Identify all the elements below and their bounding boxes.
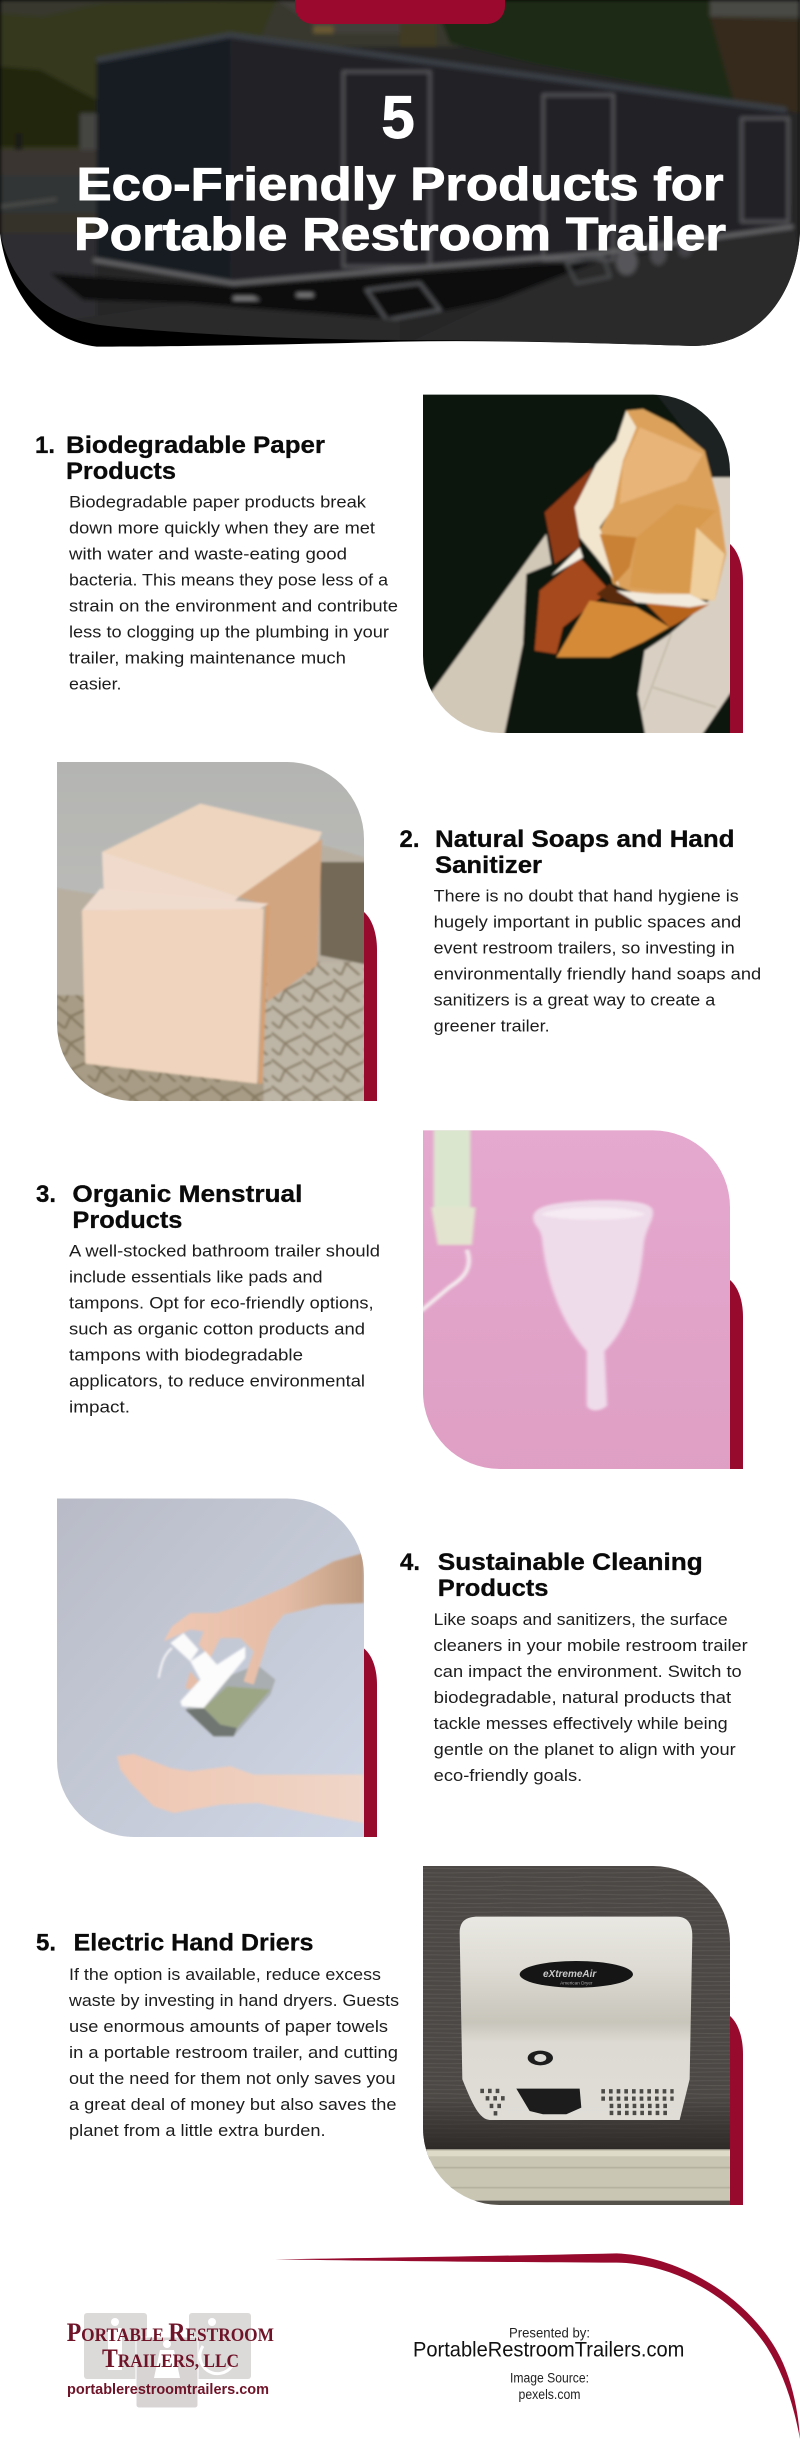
panel: item 3 organic menstrual xyxy=(36,1120,743,1479)
body text: with water and waste-eating good xyxy=(68,544,347,563)
body text: tampons. Opt for eco-friendly options, xyxy=(69,1293,374,1312)
logo: TRAILERS, LLC xyxy=(102,2344,239,2373)
heading xyxy=(35,432,325,485)
heading: 5. xyxy=(36,1930,56,1956)
heading: Products xyxy=(438,1575,548,1602)
title: Eco-Friendly Products for xyxy=(76,158,724,210)
heading xyxy=(400,1549,703,1602)
heading: Sustainable Cleaning xyxy=(438,1549,703,1576)
photo: hand dryer: eXtremeAir xyxy=(543,1969,597,1980)
body text: There is no doubt that hand hygiene is xyxy=(434,886,739,906)
title: 5 xyxy=(381,84,415,151)
heading: Organic Menstrual xyxy=(72,1181,302,1208)
body text xyxy=(434,886,761,1036)
logo: PORTABLE RESTROOM xyxy=(67,2318,274,2347)
body text: greener trailer. xyxy=(434,1016,550,1036)
panel: item 4 sustainable cleaning xyxy=(50,1491,748,1845)
logo xyxy=(67,2313,274,2408)
photo: hand dryer xyxy=(416,1859,736,2213)
body text xyxy=(69,1241,380,1416)
heading: Natural Soaps and Hand xyxy=(435,826,734,853)
accent bar xyxy=(364,1648,377,1837)
body text: applicators, to reduce environmental xyxy=(69,1371,365,1390)
body text: planet from a little extra burden. xyxy=(69,2121,326,2140)
body text: gentle on the planet to align with your xyxy=(434,1740,736,1759)
heading: Electric Hand Driers xyxy=(74,1930,314,1956)
body text: event restroom trailers, so investing in xyxy=(434,938,735,958)
body text: eco-friendly goals. xyxy=(434,1766,582,1785)
body text: less to clogging up the plumbing in your xyxy=(69,622,389,641)
accent bar xyxy=(364,912,377,1101)
body text: impact. xyxy=(69,1397,130,1416)
body text: easier. xyxy=(69,674,122,693)
body text: use enormous amounts of paper towels xyxy=(69,2017,388,2036)
body text: a great deal of money but also saves the xyxy=(69,2095,396,2114)
heading xyxy=(36,1181,302,1234)
body text: Biodegradable paper products break xyxy=(69,492,367,511)
body text: bacteria. This means they pose less of a xyxy=(69,570,389,589)
accent bar xyxy=(730,1280,743,1469)
body text: in a portable restroom trailer, and cutting xyxy=(69,2043,398,2062)
body text: A well-stocked bathroom trailer should xyxy=(69,1241,380,1260)
logo: portablerestroomtrailers.com xyxy=(67,2381,269,2398)
body text: tampons with biodegradable xyxy=(69,1345,303,1364)
body text: cleaners in your mobile restroom trailer xyxy=(434,1636,748,1655)
heading: 2. xyxy=(400,826,420,853)
heading xyxy=(400,826,734,879)
accent bar xyxy=(730,544,743,733)
photo: hands with soap pump xyxy=(50,1491,370,1845)
photo: paper bag xyxy=(416,387,736,741)
presented by: PortableRestroomTrailers.com xyxy=(413,2339,684,2362)
title xyxy=(74,84,726,260)
body text: If the option is available, reduce excess xyxy=(69,1965,381,1984)
body text: include essentials like pads and xyxy=(69,1267,323,1286)
body text: Like soaps and sanitizers, the surface xyxy=(434,1610,728,1629)
body text: waste by investing in hand dryers. Guests xyxy=(68,1991,399,2010)
body text: can impact the environment. Switch to xyxy=(434,1662,742,1681)
photo: hand dryer: American Dryer xyxy=(560,1981,593,1986)
accent bar xyxy=(730,2016,743,2205)
body text xyxy=(68,1965,399,2140)
photo: menstrual cup and tampon xyxy=(423,1130,730,1469)
footer crimson swoosh xyxy=(275,2253,800,2439)
title: Portable Restroom Trailer xyxy=(74,208,726,260)
body text: sanitizers is a great way to create a xyxy=(434,990,716,1010)
heading: Sanitizer xyxy=(435,852,542,879)
body text: out the need for them not only saves you xyxy=(69,2069,396,2088)
header black backing shape xyxy=(0,0,800,347)
body text: strain on the environment and contribute xyxy=(69,596,398,615)
body text: such as organic cotton products and xyxy=(69,1319,365,1338)
presented by xyxy=(413,2326,684,2402)
footer xyxy=(67,2253,800,2439)
body text: environmentally friendly hand soaps and xyxy=(434,964,761,984)
heading: Biodegradable Paper xyxy=(66,432,325,459)
panel: item 1 biodegradable paper xyxy=(35,387,743,741)
presented by: pexels.com xyxy=(518,2387,580,2402)
body text: tackle messes effectively while being xyxy=(434,1714,728,1733)
panel: item 2 natural soaps xyxy=(50,755,761,1109)
heading: 1. xyxy=(35,432,55,459)
heading: 4. xyxy=(400,1549,420,1576)
body text: hugely important in public spaces and xyxy=(434,912,741,932)
body text: trailer, making maintenance much xyxy=(69,648,346,667)
heading: Products xyxy=(66,458,176,485)
heading: 3. xyxy=(36,1181,56,1208)
body text xyxy=(68,492,398,693)
presented by: Presented by: xyxy=(509,2326,590,2340)
body text xyxy=(434,1610,748,1785)
header photo: restroom trailer xyxy=(0,0,800,360)
heading: Products xyxy=(72,1207,182,1234)
body text: down more quickly when they are met xyxy=(69,518,375,537)
photo: soap bars xyxy=(50,755,370,1109)
header banner xyxy=(0,0,800,360)
panel: item 5 electric hand driers xyxy=(36,1859,743,2213)
crimson top tab xyxy=(295,0,505,24)
body text: biodegradable, natural products that xyxy=(434,1688,731,1707)
presented by: Image Source: xyxy=(510,2370,589,2386)
